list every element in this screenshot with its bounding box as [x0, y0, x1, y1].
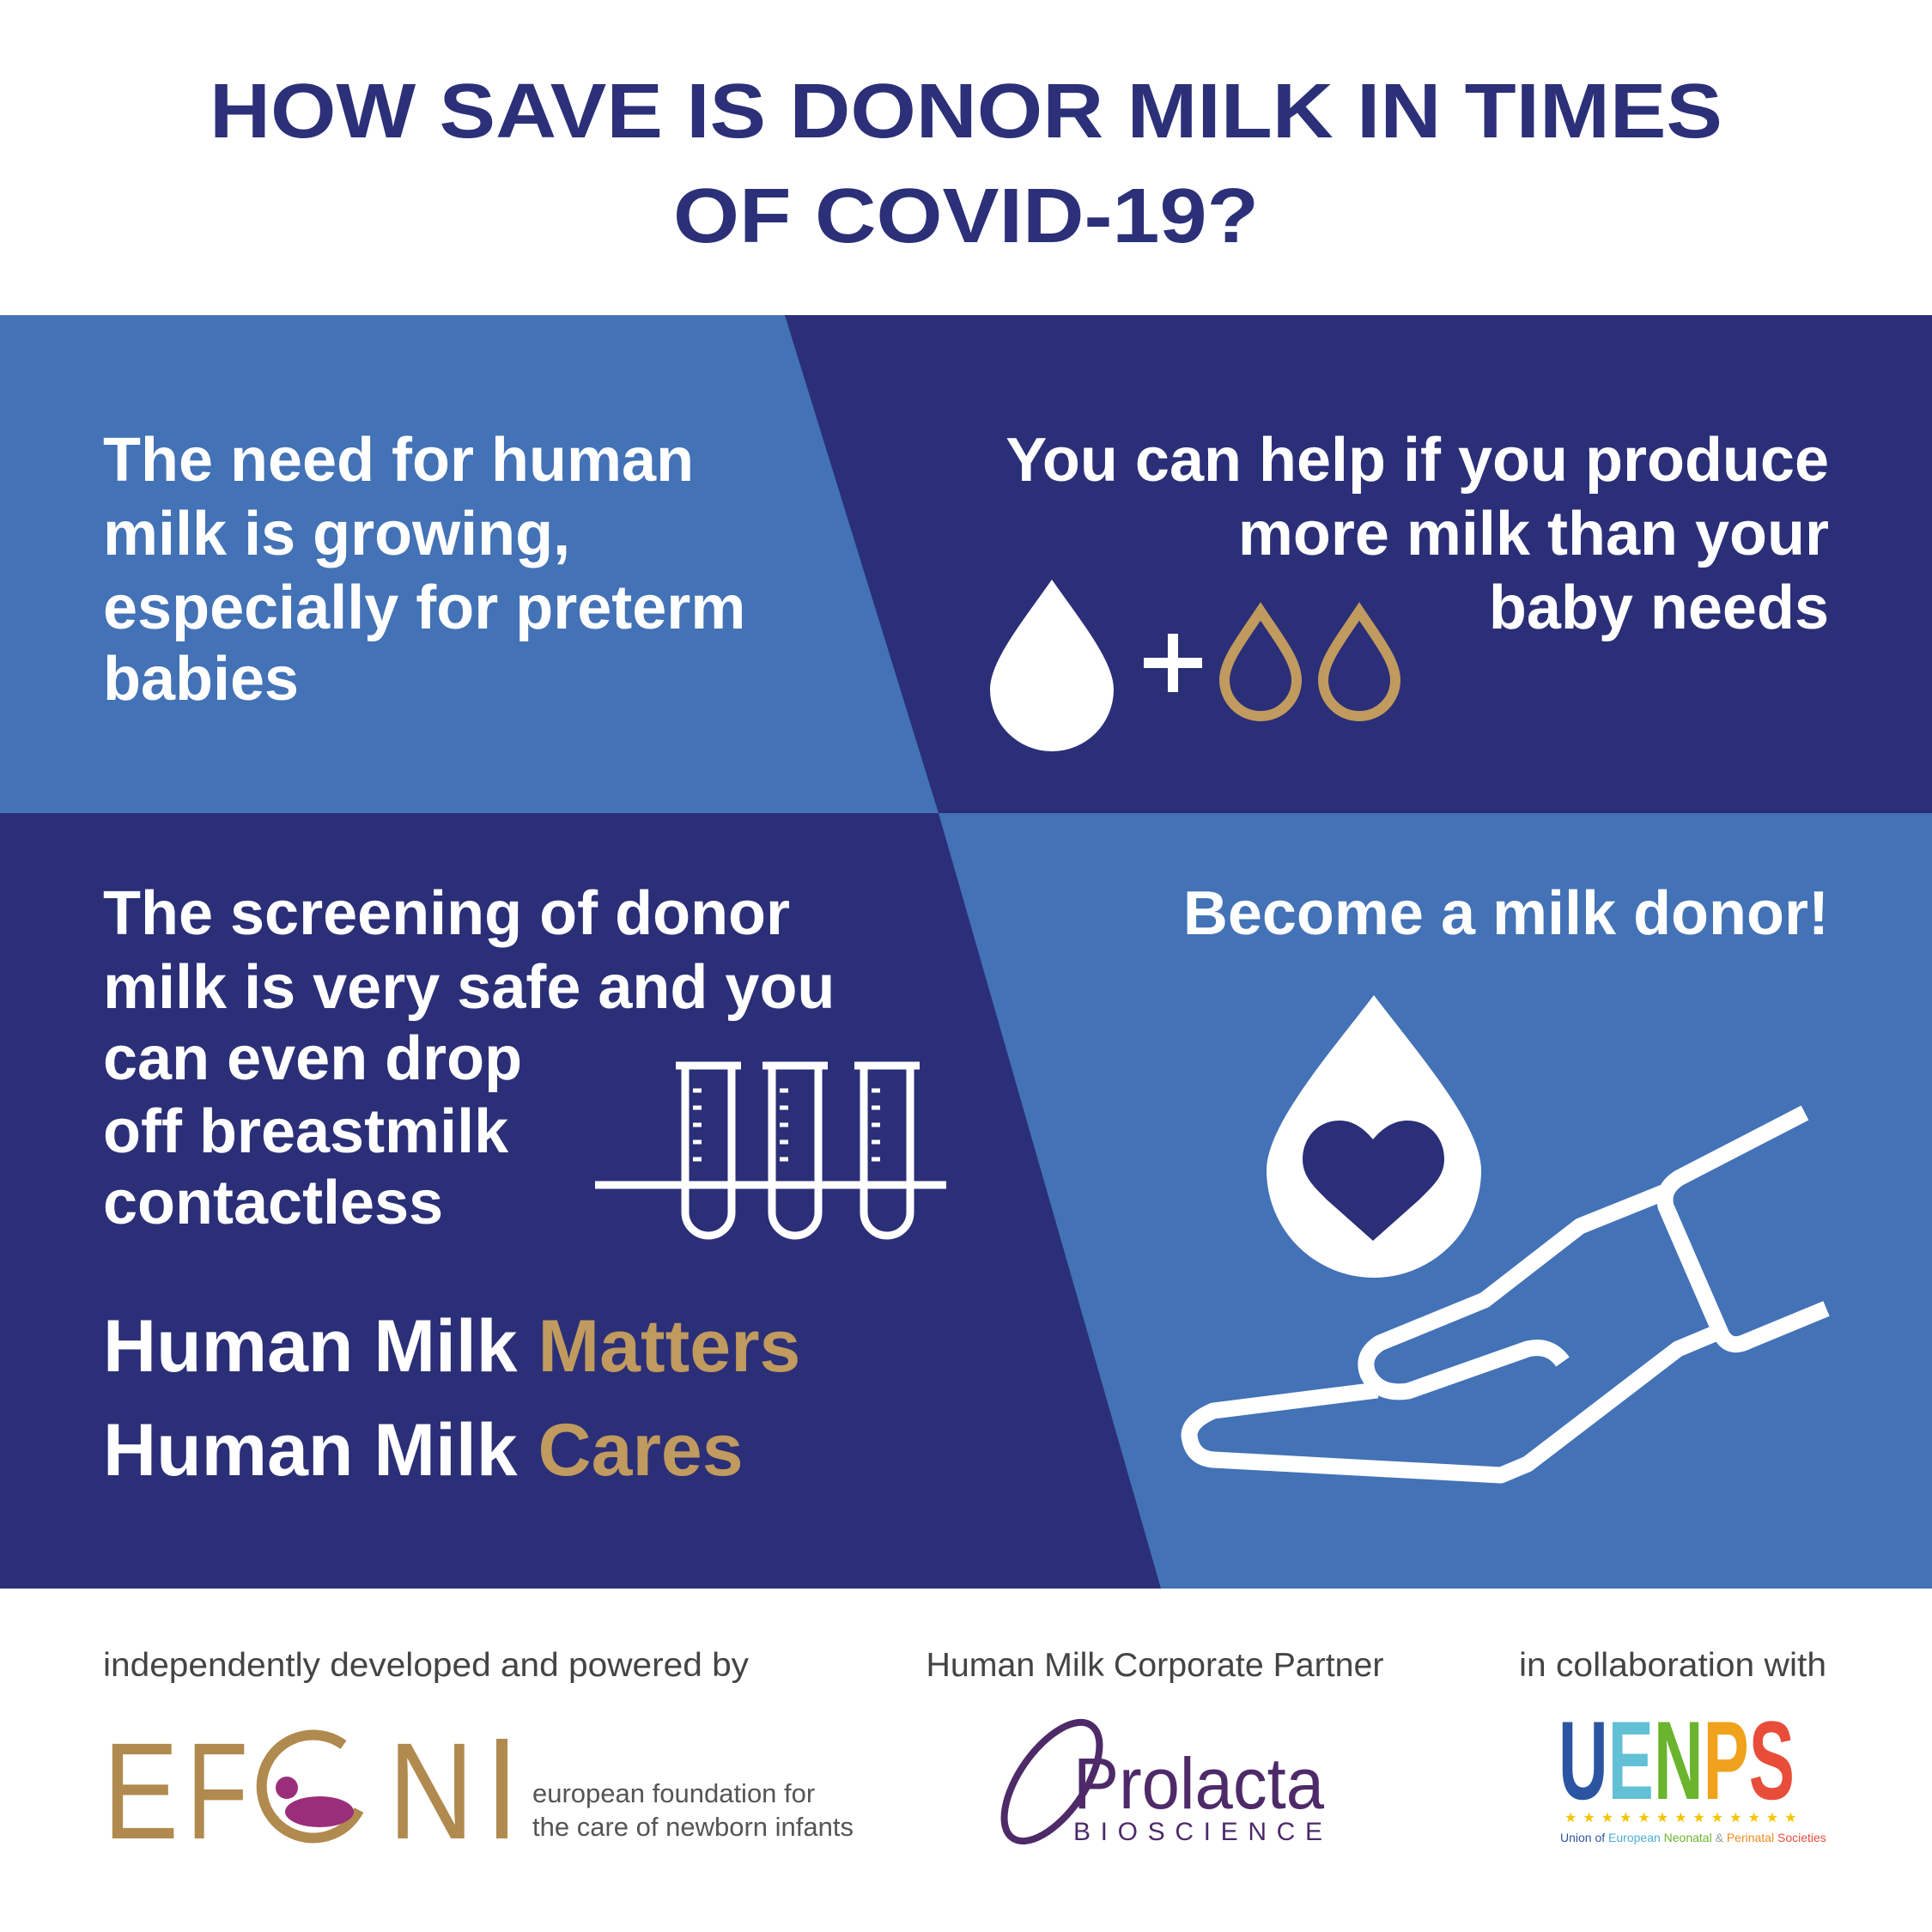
- icon: drops plus: [990, 580, 1395, 751]
- text: screening: contactless: [103, 1169, 443, 1237]
- icon: drop with heart: [1267, 995, 1481, 1278]
- logo: Prolacta: BIOSCIENCE: [1073, 1818, 1322, 1846]
- text: need for human milk: milk is growing,: [103, 500, 570, 568]
- footer labels: independently developed and powered by: [103, 1647, 750, 1684]
- logo: EFCNI: the care of newborn infants: [532, 1812, 854, 1842]
- text: you can help: You can help if you produce: [1005, 426, 1829, 495]
- text: human milk matters/cares: Human Milk Matters: [103, 1305, 800, 1388]
- icon: test tubes: [595, 1066, 946, 1236]
- text: need for human milk: babies: [103, 645, 299, 714]
- logo: UENPS: UENPS: [1558, 1698, 1795, 1823]
- text: you can help: baby needs: [1489, 574, 1829, 642]
- text: screening: [103, 879, 835, 1237]
- logo: EFCNI: N: [388, 1714, 474, 1868]
- footer labels: in collaboration with: [1519, 1647, 1826, 1684]
- logo: UENPS: Union of European Neonatal & Perinatal Societies: [1560, 1831, 1826, 1844]
- logo: EFCNI: F: [186, 1714, 248, 1868]
- footer labels: Human Milk Corporate Partner: [926, 1647, 1384, 1684]
- title: OF COVID-19?: [673, 173, 1259, 259]
- text: screening: can even drop: [103, 1024, 522, 1093]
- text: you can help: more milk than your: [1238, 500, 1829, 568]
- text: human milk matters/cares: Human Milk Cares: [103, 1409, 744, 1492]
- text: you can help: [1005, 426, 1829, 642]
- title: [210, 69, 1722, 259]
- logo: EFCNI: european foundation for: [532, 1778, 815, 1808]
- text: need for human milk: [103, 426, 745, 714]
- logo: EFCNI: [103, 1714, 854, 1868]
- title: HOW SAVE IS DONOR MILK IN TIMES: [210, 69, 1722, 155]
- logo: EFCNI: E: [103, 1714, 179, 1868]
- text: become a milk donor: Become a milk donor!: [1183, 879, 1829, 948]
- text: human milk matters/cares: [103, 1305, 800, 1492]
- icon: hand: [1189, 1113, 1826, 1475]
- logo: Prolacta: Prolacta: [1073, 1743, 1324, 1824]
- logo: UENPS: ★★★★★★★★★★★★★: [1564, 1811, 1802, 1826]
- text: need for human milk: especially for preterm: [103, 574, 745, 642]
- logo: Prolacta: [986, 1707, 1324, 1856]
- text: screening: The screening of donor: [103, 879, 790, 948]
- text: need for human milk: The need for human: [103, 426, 694, 495]
- text: screening: milk is very safe and you: [103, 953, 835, 1022]
- text: screening: off breastmilk: [103, 1097, 509, 1166]
- panel: background: [0, 315, 1932, 1589]
- footer labels: [103, 1647, 1826, 1684]
